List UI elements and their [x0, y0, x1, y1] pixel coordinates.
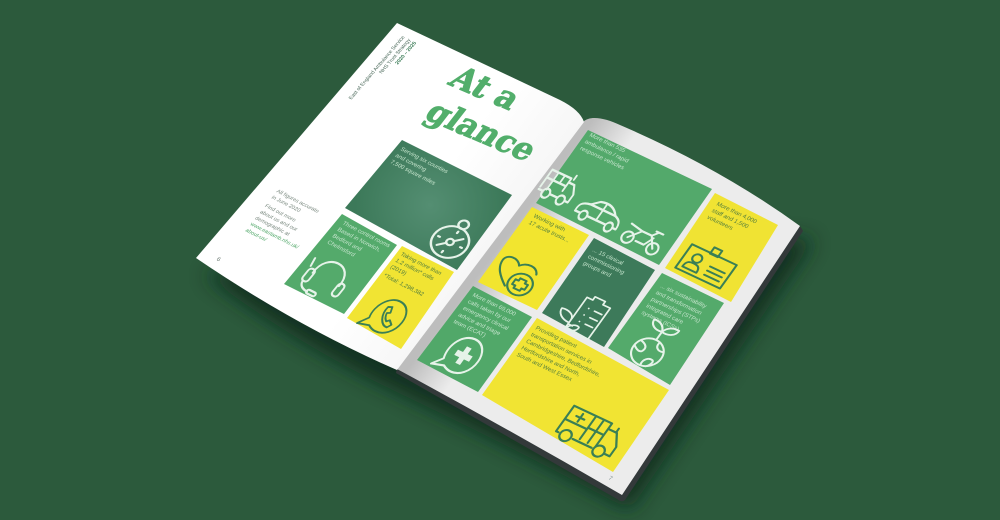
header: report name: NHS Trust Strategy: [378, 38, 413, 75]
text: note: Find out more: [263, 203, 297, 223]
header: report name: East of England Ambulance Service: [348, 35, 407, 101]
icon: motorbike: [619, 220, 668, 256]
text: patient transport: transportation services in: [529, 332, 593, 366]
icon: ID badge: [675, 239, 741, 289]
text: staff: volunteers: [705, 215, 734, 232]
heading: At a glance: At a: [441, 59, 529, 117]
text: partnerships: and transformation: [654, 290, 703, 316]
text: ECAT: emergency clinical: [461, 306, 509, 332]
page number 6: 6: [215, 257, 222, 263]
text: counties: Serving six counties: [399, 147, 449, 175]
text: patient transport: Hertfordshire and North,: [520, 346, 581, 378]
text: patient transport: Cambridgeshire, Bedfordshire,: [524, 339, 602, 379]
tile: calls: [347, 246, 454, 349]
tile: control rooms: [284, 214, 397, 314]
icon: headset: [293, 254, 356, 305]
brochure shadow: [204, 220, 814, 510]
tile: acute trusts: [478, 207, 589, 310]
text: control rooms: Based in Norwich,: [336, 227, 382, 253]
text: note: All figures accurate: [275, 189, 320, 215]
text: staff: staff and 1,500: [710, 208, 750, 230]
text: vehicles: response vehicles: [578, 146, 625, 171]
tile: staff: [665, 193, 778, 302]
icon: ambulance: [552, 406, 628, 461]
text: ECAT: calls taken by our: [466, 299, 512, 324]
text: note: www.eastamb.nhs.uk/: [248, 221, 300, 251]
text: commissioning groups: groups and: [581, 261, 612, 279]
text: partnerships: partnerships (STPs): [649, 297, 701, 325]
icon: compass: [423, 213, 482, 264]
icon: globe with seedling: [625, 319, 681, 371]
text: calls: (2019): [389, 265, 407, 277]
header: report name: 2020 – 2025: [394, 41, 418, 66]
icon: speech bubble with plus: [431, 330, 489, 379]
text: control rooms: Bedford and: [331, 234, 363, 253]
text: note: about-us/: [244, 228, 268, 243]
right page: [397, 118, 800, 495]
text: control rooms: Chelmsford: [325, 240, 356, 258]
text: control rooms: Three control rooms: [341, 221, 391, 249]
text: ECAT: team (ECAT): [452, 319, 486, 339]
tile: clinical commissioning groups: [542, 238, 655, 347]
left page: [196, 23, 584, 370]
text: note: about us and our: [258, 210, 299, 233]
icon: ambulance outline: [535, 166, 584, 208]
text: patient transport: South and West Essex: [515, 352, 573, 383]
text: calls: 1.2 million* calls: [394, 258, 435, 282]
text: calls: Taking more than: [399, 252, 443, 277]
text: commissioning groups: commissioning: [586, 254, 625, 276]
icon: heart with plus: [487, 254, 544, 299]
icon: car: [571, 194, 627, 234]
text: commissioning groups: ... 15 clinical: [591, 248, 624, 267]
page number 7: 7: [607, 476, 614, 482]
text: ECAT: More than 69,000: [471, 293, 517, 318]
tile: ECAT calls: [417, 286, 532, 392]
text: partnerships: ... six sustainability: [659, 284, 707, 310]
text: vehicles: More than 535: [588, 133, 627, 154]
text: acute trusts: Working with: [532, 214, 566, 233]
text: staff: More than 4,000: [715, 202, 758, 225]
text: partnerships: systems (ICSs): [640, 310, 680, 332]
page block thickness: [396, 226, 803, 501]
text: patient transport: Providing patient: [534, 326, 578, 350]
heading: At a glance: [418, 59, 545, 168]
text: note: demographic at: [253, 216, 291, 238]
heading: At a glance: glance: [418, 93, 545, 168]
text: counties: 7,500 square miles: [389, 160, 436, 187]
text: calls: *Total: 1,298,382: [382, 273, 425, 298]
icon: phone speech bubble: [357, 292, 413, 339]
tile: six counties: [345, 140, 512, 270]
text: partnerships: integrated care: [645, 304, 685, 326]
text: counties: and covering: [394, 153, 427, 173]
icon: clipboard with leaves: [552, 288, 613, 339]
text: ECAT: advice and triage: [457, 313, 502, 337]
tile: vehicles: [536, 130, 712, 265]
text: acute trusts: 17 acute trusts...: [527, 220, 571, 244]
tile: sustainability partnerships: [608, 273, 724, 385]
tile: patient transport: [482, 318, 669, 472]
text: note: in June 2020: [270, 195, 302, 214]
text: vehicles: ambulance / rapid: [583, 139, 630, 164]
